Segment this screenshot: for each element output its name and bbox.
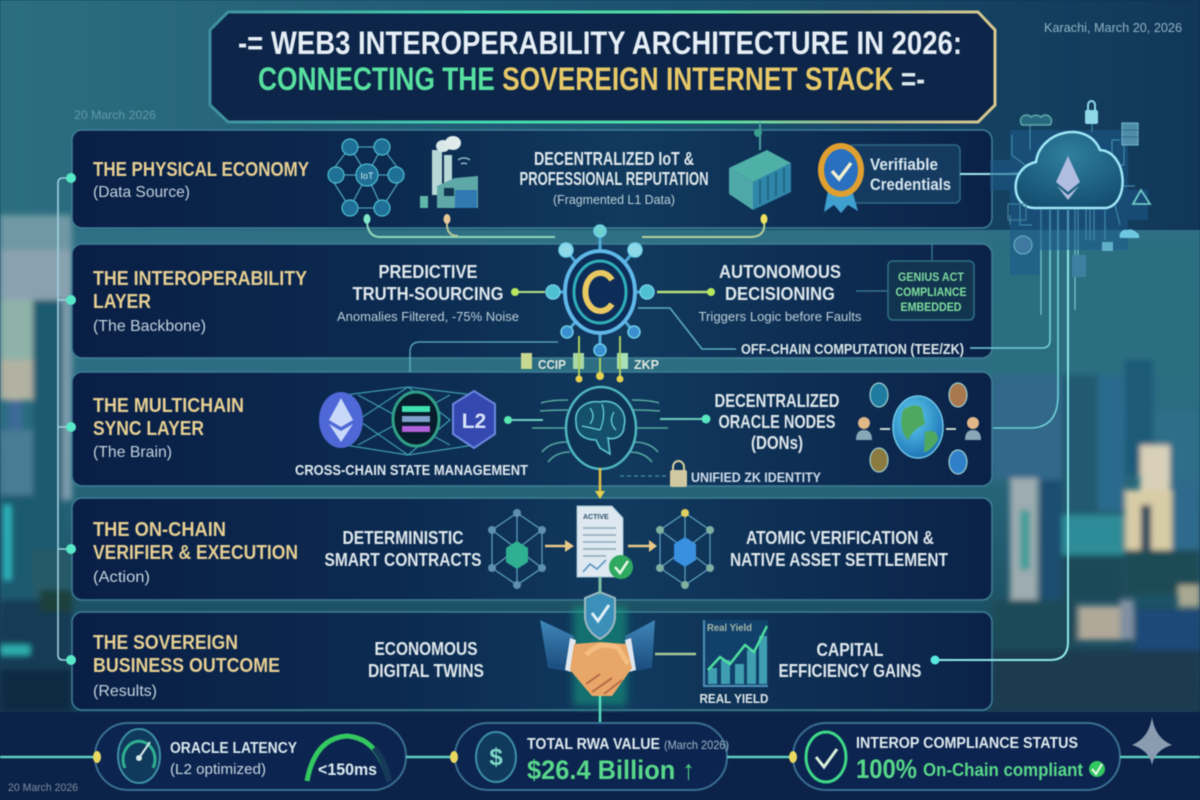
date: Karachi: Karachi, March 20, 2026 — [1044, 20, 1182, 35]
panel 1 subheading: (Data Source) — [93, 184, 190, 201]
text: deterministic smart contracts: SMART CONTRACTS — [324, 550, 482, 570]
panel 3: multichain sync layer — [72, 372, 992, 487]
panel 2: interoperability layer — [72, 244, 992, 358]
CCIP tag with document icon: CCIP — [538, 357, 566, 372]
date stamp bottom: 20 March 2026 — [8, 782, 78, 794]
chart: real yield: Real Yield — [707, 623, 752, 634]
title line 1: -= WEB3 INTEROPERABILITY ARCHITECTURE IN 2026: — [238, 25, 962, 61]
compliance figure: 100% — [856, 754, 917, 784]
text: decentralized IoT: DECENTRALIZED IoT & — [534, 149, 694, 169]
compliance label: INTEROP COMPLIANCE STATUS — [856, 735, 1078, 752]
panel 4 subheading: (Action) — [93, 569, 150, 586]
connector: handshake to chart — [655, 653, 696, 655]
icon: green check seal — [609, 555, 633, 579]
left data bus connector — [58, 173, 76, 665]
icon: IoT network: IoT — [360, 171, 374, 181]
panel 3 subheading: (The Brain) — [93, 444, 172, 461]
title banner — [210, 12, 995, 122]
date stamp top: 20 March 2026 — [74, 108, 156, 122]
arrows: hub to brain — [573, 336, 624, 382]
text: decentralized IoT — [520, 149, 708, 207]
text: economous digital twins — [368, 639, 484, 681]
total RWA date: (March 2026) — [664, 738, 729, 752]
cloud satellite icons — [1008, 101, 1150, 277]
genius act compliance box: GENIUS ACT — [898, 270, 965, 284]
text: decentralized IoT: PROFESSIONAL REPUTATION — [520, 169, 708, 189]
icon: IoT network — [328, 139, 404, 216]
verifiable credentials box: Verifiable — [870, 155, 938, 174]
panel 4 heading: THE ON-CHAIN — [93, 519, 226, 541]
panel 5: sovereign business outcome — [72, 592, 992, 710]
panel 3 heading — [93, 395, 244, 440]
icon: blue block network — [656, 509, 714, 589]
text: decentralized oracle nodes — [714, 391, 840, 453]
text: deterministic smart contracts: DETERMINISTIC — [342, 528, 464, 548]
connector: outcome to metrics — [599, 696, 601, 727]
icon: shield — [585, 592, 615, 639]
panel 5 heading: BUSINESS OUTCOME — [93, 655, 280, 677]
genius act compliance box: COMPLIANCE — [896, 285, 966, 299]
arrow: brain to contract — [595, 468, 605, 499]
icon: globe with oracle nodes — [856, 383, 981, 474]
text: atomic verification: NATIVE ASSET SETTLEMENT — [730, 550, 948, 570]
panel 1 heading: THE PHYSICAL ECONOMY — [93, 159, 310, 181]
compliance caption: On-Chain compliant — [923, 760, 1083, 780]
icon: brain — [532, 387, 668, 469]
hub: interoperability C core — [546, 225, 654, 356]
bracket line around CCIP — [410, 342, 558, 372]
text: economous digital twins: ECONOMOUS — [374, 639, 478, 659]
panel 2 heading — [93, 268, 308, 313]
panel 4 heading — [93, 519, 298, 564]
right side connectors to cloud — [930, 174, 1094, 664]
metric: oracle latency — [95, 723, 406, 790]
chart: real yield: REAL YIELD — [700, 691, 768, 706]
text: capital efficiency gains — [778, 640, 922, 681]
connector: IoT and factory to hub — [364, 214, 555, 237]
chain network: Ethereum, Solana, L2 — [319, 387, 495, 455]
gauge: under 150ms: <150ms — [318, 761, 377, 779]
text: atomic verification — [730, 528, 948, 570]
bottom metrics connector — [0, 751, 1200, 763]
text: autonomous decisioning: Triggers Logic before Faults — [698, 309, 862, 324]
CCIP tag with document icon — [521, 353, 566, 372]
connector: hub to decisioning — [657, 288, 715, 296]
genius act compliance box — [856, 244, 974, 320]
cloud with Ethereum logo — [990, 101, 1150, 277]
metric: total RWA value — [455, 723, 729, 790]
metric: interop compliance status — [793, 723, 1120, 790]
panel 3 heading: THE MULTICHAIN — [93, 395, 244, 417]
off-chain computation label — [638, 308, 964, 358]
oracle latency label: ORACLE LATENCY — [170, 740, 297, 757]
icon: factory — [420, 136, 478, 208]
panel 3 heading: SYNC LAYER — [93, 418, 204, 440]
unified ZK identity with lock: UNIFIED ZK IDENTITY — [691, 469, 822, 485]
icon: handshake — [540, 606, 655, 706]
text: predictive truth-sourcing: Anomalies Filtered, -75% Noise — [337, 309, 519, 324]
text: decentralized oracle nodes: ORACLE NODES — [718, 412, 836, 432]
icon: small check — [1089, 761, 1105, 777]
icon: green block network — [488, 509, 546, 589]
icon: sparkle star — [1132, 717, 1172, 765]
panel 2 subheading: (The Backbone) — [93, 318, 206, 335]
text: capital efficiency gains: EFFICIENCY GAINS — [778, 661, 922, 681]
icon: smart contract document: ACTIVE — [583, 514, 609, 521]
panel 5 heading: THE SOVEREIGN — [93, 632, 238, 654]
connector: contract to shield — [598, 577, 602, 594]
text: cross-chain state management: CROSS-CHAIN STATE MANAGEMENT — [295, 463, 528, 479]
text: deterministic smart contracts — [324, 528, 482, 570]
ZKP tag with document icon: ZKP — [634, 357, 659, 372]
ZKP tag with document icon — [617, 353, 659, 372]
panel 4 heading: VERIFIER & EXECUTION — [93, 542, 298, 564]
unified ZK identity with lock — [620, 461, 822, 487]
oracle latency label: (L2 optimized) — [170, 761, 266, 778]
connector: brain to oracle nodes — [660, 414, 710, 424]
text: decentralized oracle nodes: (DONs) — [751, 433, 803, 453]
off-chain computation label: OFF-CHAIN COMPUTATION (TEE/ZK) — [741, 342, 964, 358]
panel 4: on-chain verifier — [72, 498, 992, 600]
total RWA label: TOTAL RWA VALUE — [527, 736, 660, 753]
arrow: block to contract — [545, 540, 574, 552]
icon: Ethereum coin — [319, 392, 363, 448]
dot: capital gains connector — [930, 656, 940, 664]
icon: dollar coin: $ — [489, 744, 503, 771]
text: decentralized oracle nodes: DECENTRALIZED — [714, 391, 840, 411]
icon: L2 hexagon: L2 — [462, 410, 486, 433]
connector: chains to brain — [504, 416, 543, 424]
genius act compliance box: EMBEDDED — [900, 300, 962, 314]
icon: speedometer — [118, 729, 160, 783]
gauge: under 150ms — [307, 736, 389, 781]
oracle latency label — [170, 740, 297, 778]
text: capital efficiency gains: CAPITAL — [816, 640, 884, 660]
title line 2: CONNECTING THE SOVEREIGN INTERNET STACK =- — [258, 61, 925, 97]
text: autonomous decisioning: AUTONOMOUS — [719, 262, 841, 282]
verifiable credentials box: Credentials — [870, 175, 951, 194]
chart: real yield — [700, 620, 768, 706]
icon: dollar coin — [476, 732, 516, 782]
text: economous digital twins: DIGITAL TWINS — [368, 661, 484, 681]
text: predictive truth-sourcing: PREDICTIVE — [378, 262, 478, 282]
text: decentralized IoT: (Fragmented L1 Data) — [553, 192, 675, 207]
icon: Solana coin — [393, 392, 439, 446]
panel 2 heading: LAYER — [93, 291, 151, 313]
icon: L2 hexagon — [453, 391, 495, 448]
text: autonomous decisioning — [698, 262, 862, 324]
verifiable credentials box — [848, 145, 960, 203]
panel 2 heading: THE INTEROPERABILITY — [93, 268, 308, 290]
panel 5 heading — [93, 632, 280, 677]
text: autonomous decisioning: DECISIONING — [725, 284, 835, 304]
icon: shipping container — [642, 122, 791, 237]
panel 1: physical economy — [72, 122, 992, 237]
text: atomic verification: ATOMIC VERIFICATION & — [746, 528, 934, 548]
icon: credential badge — [818, 143, 864, 213]
arrow: contract to asset — [628, 540, 657, 552]
connector: truth-sourcing to hub — [511, 288, 545, 296]
text: predictive truth-sourcing: TRUTH-SOURCING — [352, 284, 504, 304]
panel 5 subheading: (Results) — [93, 683, 157, 700]
total RWA figure: $26.4 Billion ↑ — [527, 755, 695, 785]
icon: smart contract document — [577, 506, 633, 579]
text: predictive truth-sourcing — [337, 262, 519, 324]
icon: check circle — [806, 732, 846, 782]
